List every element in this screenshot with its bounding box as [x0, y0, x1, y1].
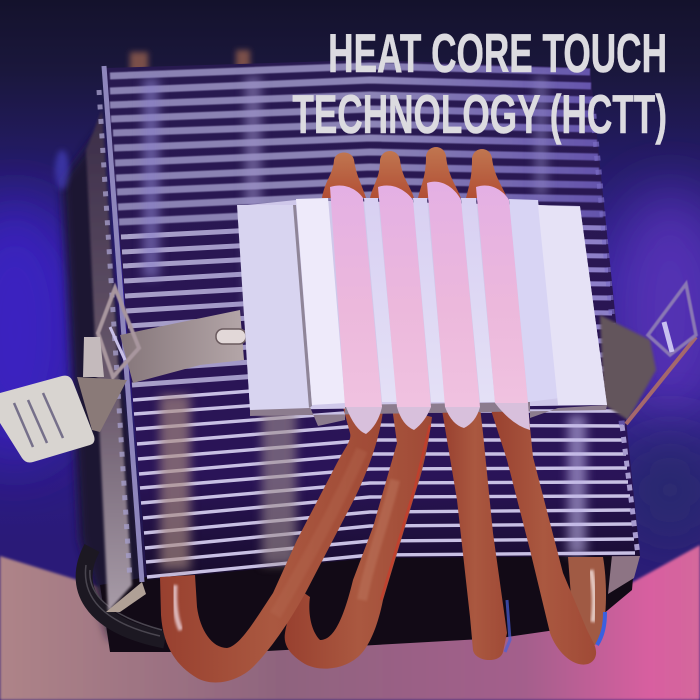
heatsink fin stack — [86, 60, 640, 612]
lever arm — [77, 377, 127, 432]
title line 2: TECHNOLOGY (HCTT) — [292, 83, 667, 145]
blurred rear heat pipes — [143, 76, 586, 570]
bottom left silver corner — [106, 582, 146, 612]
light wire — [664, 322, 672, 352]
right strap — [600, 315, 656, 420]
left mounting strap — [120, 310, 246, 383]
lower fins — [133, 382, 635, 577]
right block 1 — [509, 199, 560, 402]
right mounting clip — [600, 284, 696, 424]
copper pipe tips — [322, 147, 507, 198]
pipe face 2 — [378, 185, 431, 407]
copper heat pipe 3 — [442, 407, 510, 660]
right fin edge — [592, 100, 622, 425]
wooden table surface — [0, 545, 700, 700]
light strip 1 — [364, 198, 397, 402]
rear copper heat pipe loop, right — [568, 557, 606, 647]
pipe face 1 — [330, 185, 382, 407]
lower right rail — [622, 425, 638, 556]
pipe face 3 — [427, 182, 480, 407]
blurred rear pipe tips — [130, 50, 250, 74]
black fan cable — [84, 548, 165, 640]
middle fins — [121, 224, 618, 385]
fin gaps — [106, 60, 640, 580]
aluminium contact base — [237, 182, 607, 434]
upper fins — [110, 66, 603, 222]
left block — [237, 205, 310, 410]
right block 2 — [538, 205, 607, 405]
base lower edge — [250, 402, 607, 426]
light strip 2 — [413, 198, 445, 402]
copper heat pipe 1 — [160, 407, 383, 682]
copper heat pipe 4 — [490, 407, 596, 665]
black cooler underside — [100, 553, 640, 652]
copper heat pipe 2 — [285, 407, 432, 669]
copper wire — [626, 337, 696, 424]
inner wire — [110, 327, 125, 360]
frosted pipe ends — [346, 403, 530, 434]
title — [292, 22, 667, 145]
square wire — [648, 284, 696, 355]
hinge — [83, 337, 104, 377]
title line 1: HEAT CORE TOUCH — [328, 22, 667, 84]
base backing — [238, 200, 607, 410]
left lever clip — [0, 288, 139, 462]
blue reflection behind cooler — [55, 150, 69, 190]
lever handle — [0, 376, 94, 462]
handle ridges — [14, 393, 63, 447]
left rail knobs — [99, 90, 130, 580]
pipe face 4 — [476, 185, 528, 403]
left rail — [104, 66, 142, 582]
second block — [296, 198, 345, 405]
shadow column behind cooler — [62, 130, 150, 640]
wire loop — [98, 288, 139, 377]
serrated side column — [86, 110, 132, 612]
light strip 3 — [461, 198, 495, 402]
